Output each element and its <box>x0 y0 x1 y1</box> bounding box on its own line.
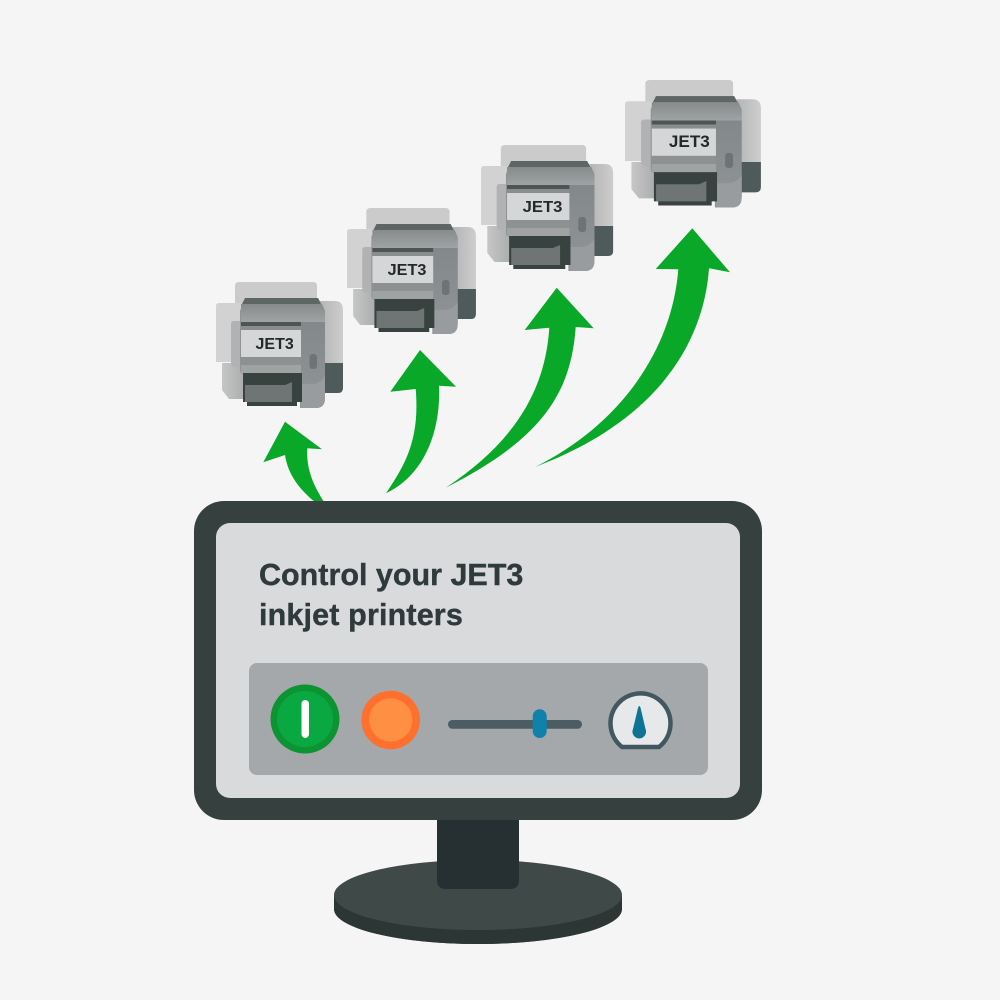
printer 3 <box>481 145 613 271</box>
arrow 3 <box>446 288 594 488</box>
arrow 2 <box>386 350 456 493</box>
stand base <box>334 895 622 944</box>
gauge <box>611 693 670 747</box>
printer 1 <box>216 282 343 408</box>
printer 2 label: JET3 <box>388 261 426 279</box>
slider <box>448 709 582 738</box>
monitor bezel <box>194 501 762 820</box>
control panel <box>249 663 708 775</box>
monitor stand <box>334 815 622 944</box>
headline: Control your JET3 <box>259 558 523 592</box>
arrow 1 <box>263 422 324 502</box>
printer 1 label: JET3 <box>256 336 294 353</box>
headline: inkjet printers <box>259 598 463 632</box>
printer 4 label: JET3 <box>669 132 710 151</box>
orange button <box>361 691 420 749</box>
printer 3 label: JET3 <box>523 198 562 216</box>
printer 4 <box>625 80 761 207</box>
monitor <box>194 501 762 820</box>
stand neck <box>437 815 519 889</box>
arrow 4 <box>535 228 730 467</box>
power button <box>270 684 340 754</box>
printer 2 <box>347 208 476 334</box>
monitor screen <box>216 523 740 798</box>
